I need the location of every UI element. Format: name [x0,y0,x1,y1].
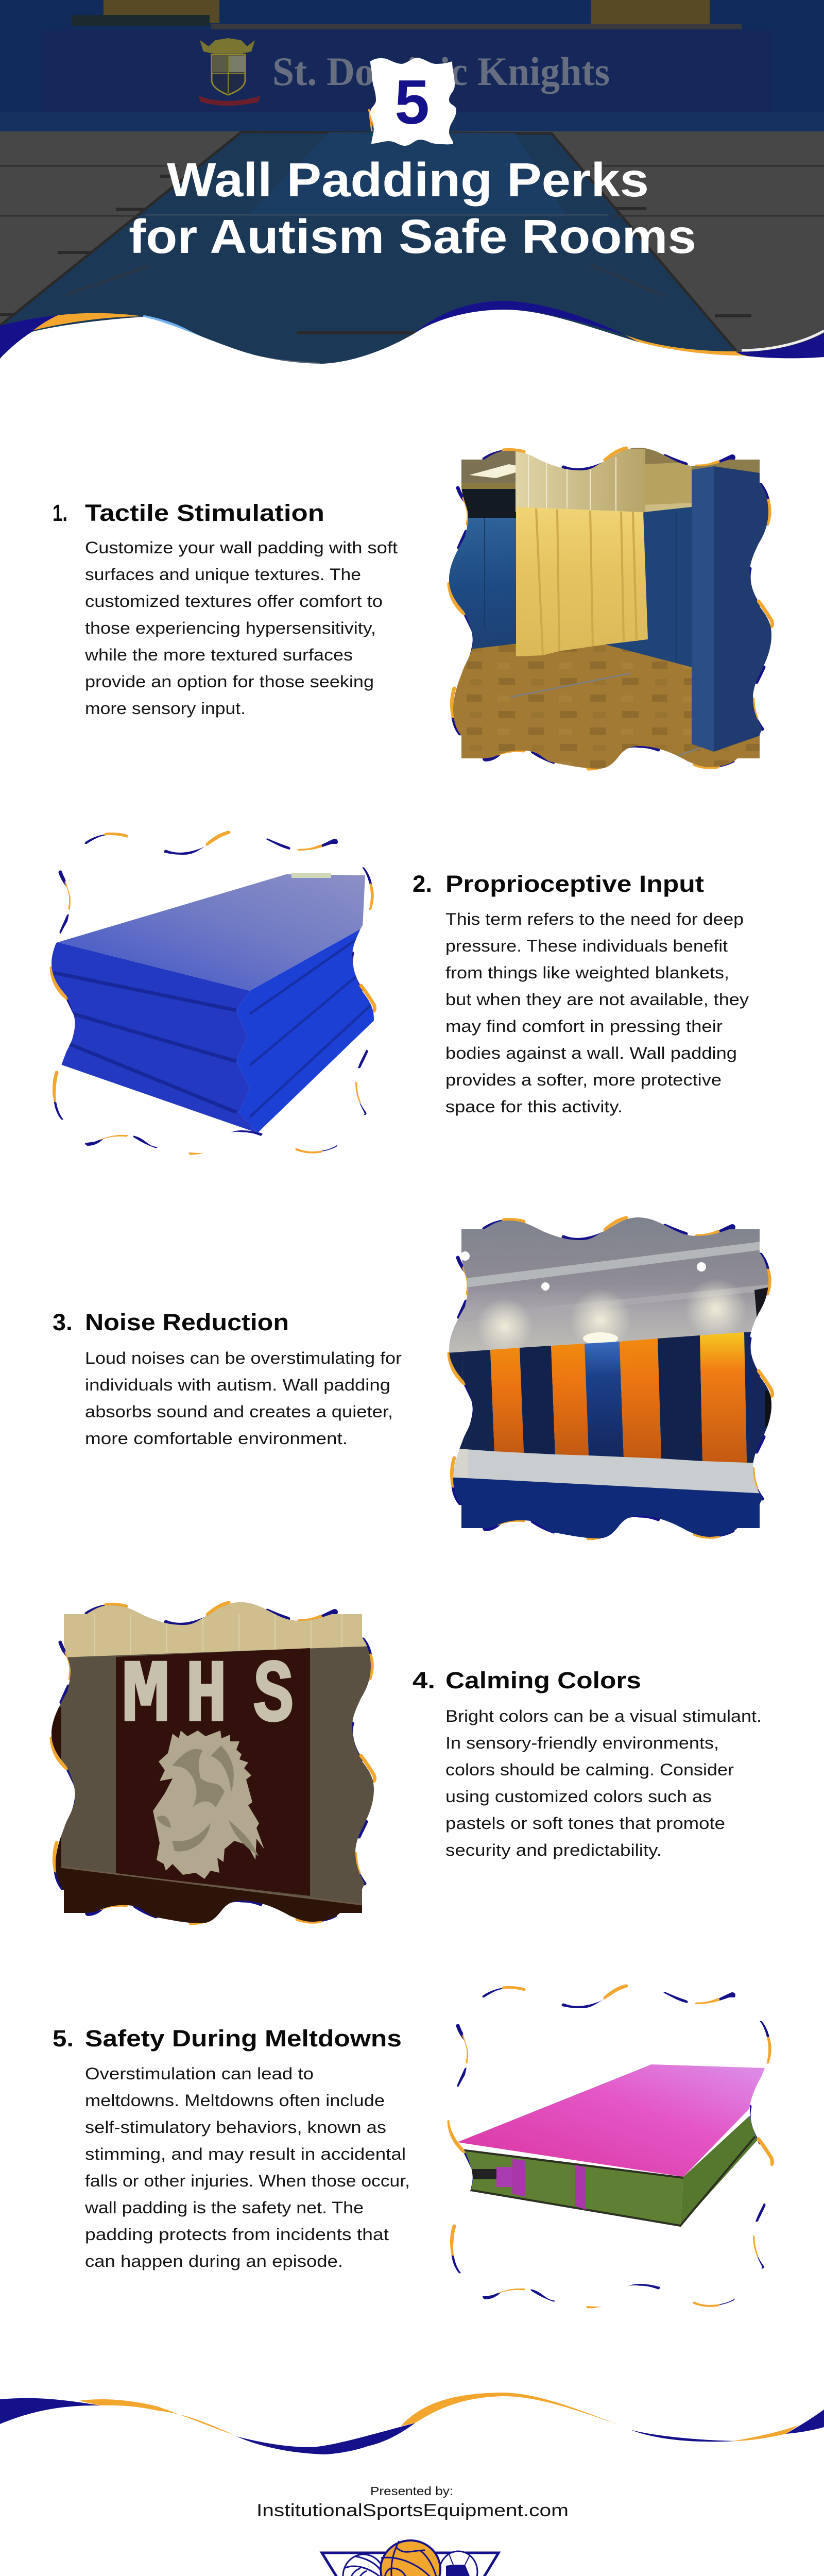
heading 4: Calming Colors [445,1667,641,1693]
text block 1 [84,538,398,718]
wall lettering: St. Dominic Knights [272,49,610,94]
header white wave edge [0,310,824,381]
wall letters [125,1660,293,1722]
text block 2: but when they are not available, they [445,990,749,1009]
title [129,153,696,263]
photo: blue padded room with curtain [446,444,791,784]
photo: blue folded mat [48,828,393,1168]
icon: basketball [381,2540,440,2576]
text block 1: surfaces and unique textures. The [85,565,361,584]
text block 4 [445,1707,762,1859]
icon: wall crest [198,38,260,106]
presented by: InstitutionalSportsEquipment.com [256,2501,569,2520]
panel: 1 tactile stimulation [53,444,791,784]
text block 1: customized textures offer comfort to [85,592,383,611]
text block 5: stimming, and may result in accidental [85,2145,406,2163]
photo: orange and navy wall panels [446,1214,786,1554]
text block 2: This term refers to the need for deep [445,910,744,928]
panel: 2 proprioceptive input [48,828,749,1168]
text block 1: provide an option for those seeking [85,672,374,691]
text block 2 [445,910,749,1116]
text block 5: meltdowns. Meltdowns often include [85,2091,385,2110]
panel: header photo background [0,0,824,376]
text block 3: more comfortable environment. [85,1429,348,1448]
text block 4: Bright colors can be a visual stimulant. [445,1707,762,1725]
text block 3: absorbs sound and creates a quieter, [85,1402,393,1421]
text block 2: provides a softer, more protective [445,1071,722,1089]
text block 2: may find comfort in pressing their [445,1017,723,1036]
text block 1: those experiencing hypersensitivity, [85,619,376,637]
text block 5: wall padding is the safety net. The [84,2198,364,2217]
heading 5: Safety During Meltdowns [85,2025,402,2052]
panel: 3 noise reduction [53,1214,786,1554]
heading 1: Tactile Stimulation [85,500,324,526]
text block 5: Overstimulation can lead to [85,2064,314,2083]
text block 2: bodies against a wall. Wall padding [445,1044,737,1062]
title: for Autism Safe Rooms [129,210,696,263]
logo: Institutional Sports Equipment [275,2540,550,2576]
photo: pink and green mat [446,1982,786,2322]
title: Wall Padding Perks [167,153,649,207]
icon: volleyball [343,2554,384,2576]
text block 2: from things like weighted blankets, [445,963,729,982]
text block 5: padding protects from incidents that [85,2225,389,2244]
badge: number 5: 5 [394,67,430,137]
presented by [256,2484,569,2520]
heading 1: 1. [53,500,67,526]
heading 2: Proprioceptive Input [445,871,704,897]
wall letters: S [253,1647,294,1747]
heading 5: 5. [53,2025,74,2052]
wall letters: M [122,1647,170,1747]
panel: 5 safety during meltdowns [53,1982,786,2322]
wall letters: H [185,1647,227,1747]
text block 1: Customize your wall padding with soft [85,538,398,557]
text block 4: In sensory-friendly environments, [445,1734,719,1752]
heading 3: 3. [53,1309,73,1335]
text block 4: pastels or soft tones that promote [445,1814,725,1833]
presented by: Presented by: [370,2484,453,2498]
header wave ribbons [0,301,824,365]
text block 5 [84,2064,410,2270]
panel: 4 calming colors [48,1599,762,1939]
heading 4: 4. [413,1667,435,1693]
badge: number 5 [369,58,456,146]
text block 4: security and predictability. [445,1841,662,1859]
text block 5: self-stimulatory behaviors, known as [85,2118,386,2137]
heading 2: 2. [413,871,432,897]
icon: soccer ball [439,2551,477,2576]
photo: MHS lion wall padding [48,1599,388,1939]
text block 3: Loud noises can be overstimulating for [85,1349,402,1367]
text block 2: pressure. These individuals benefit [445,937,728,955]
text block 4: colors should be calming. Consider [445,1760,734,1779]
footer wave ribbon [0,2393,824,2454]
text block 5: can happen during an episode. [85,2252,343,2270]
heading 3: Noise Reduction [85,1309,289,1335]
text block 1: more sensory input. [85,699,246,718]
text block 3: individuals with autism. Wall padding [85,1376,390,1394]
text block 2: space for this activity. [445,1097,623,1116]
text block 1: while the more textured surfaces [84,646,353,664]
text block 3 [85,1349,402,1448]
text block 5: falls or other injuries. When those occur, [85,2172,410,2190]
icon: lion head [153,1731,264,1879]
text block 4: using customized colors such as [445,1787,712,1806]
